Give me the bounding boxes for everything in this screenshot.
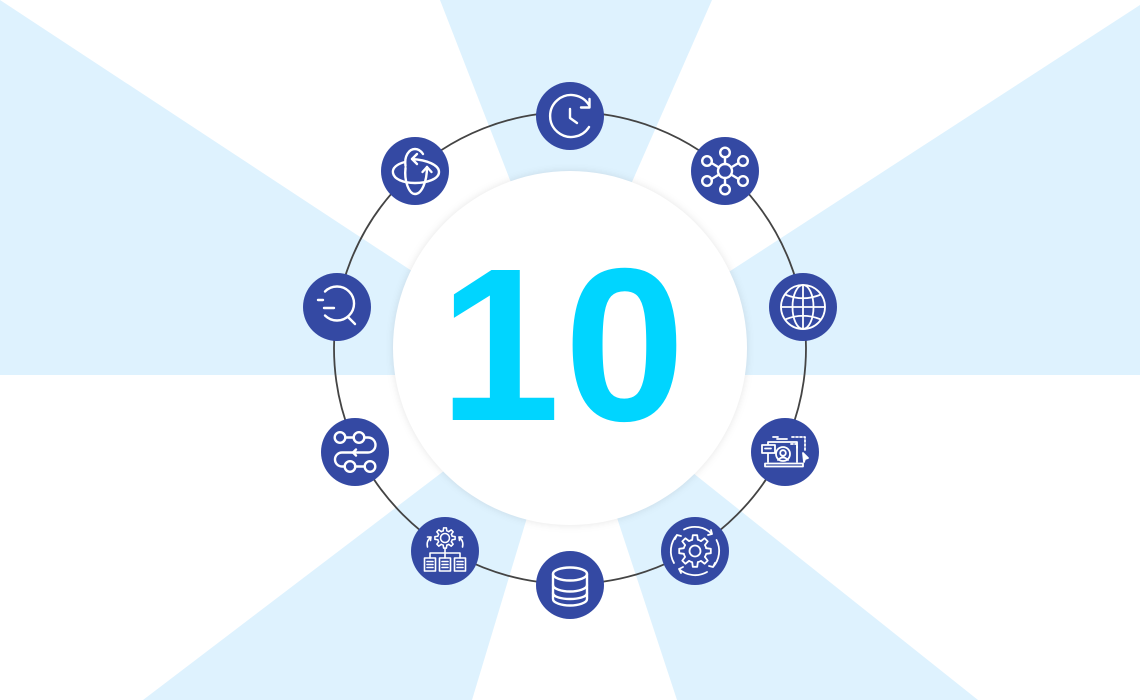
icon: laptop with webcam and cursor xyxy=(751,418,819,486)
icon: process path xyxy=(321,418,389,486)
icon: clock with refresh arrow xyxy=(536,82,604,150)
ring connecting the icons xyxy=(334,112,806,584)
icon: magnifier with speed dashes xyxy=(303,273,371,341)
icon: globe xyxy=(769,273,837,341)
icon: database xyxy=(536,551,604,619)
central white circle xyxy=(393,171,747,525)
big number: 10 xyxy=(439,224,685,467)
icon: gear with three documents xyxy=(411,517,479,585)
icon: gear in rotating arrows xyxy=(661,517,729,585)
icon: 3D orbit rotation xyxy=(381,137,449,205)
icon: network hub xyxy=(691,137,759,205)
